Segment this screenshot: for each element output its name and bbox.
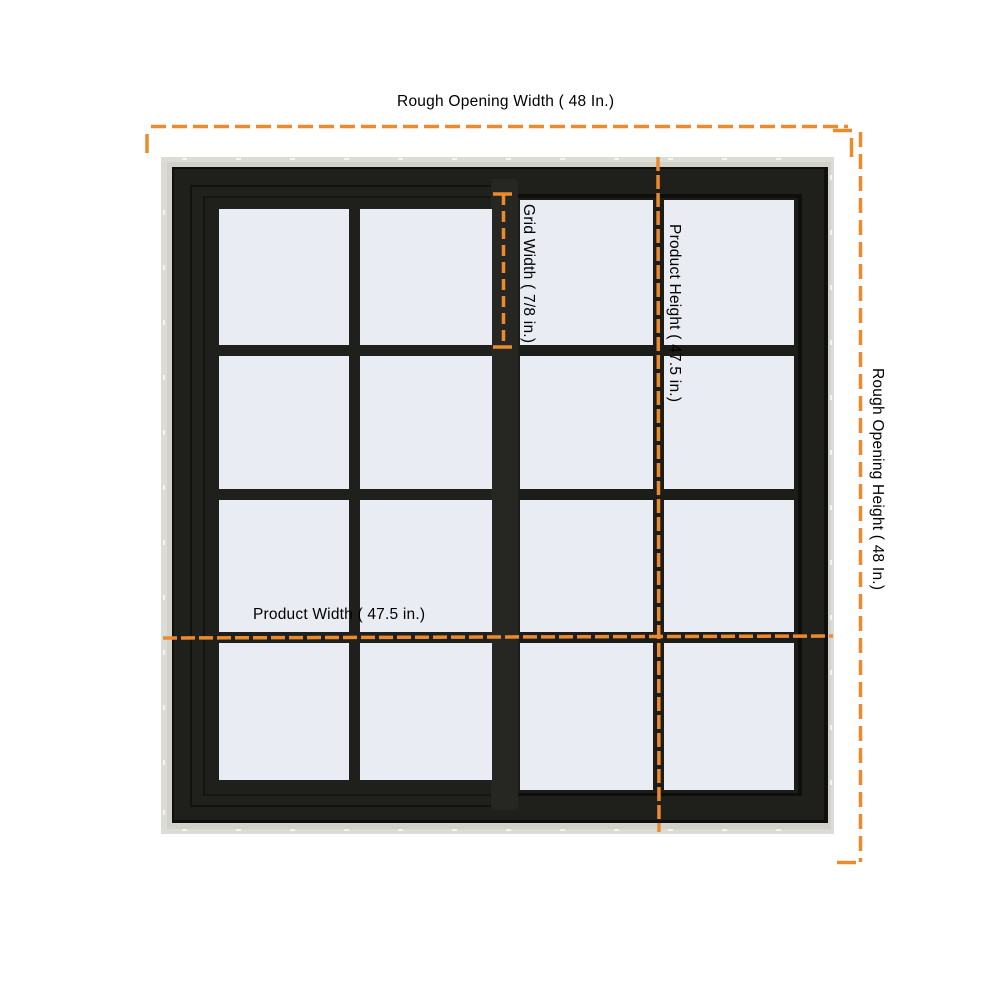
- window frame: [172, 167, 828, 823]
- glass panes: [219, 200, 794, 790]
- label: grid width: Grid Width ( 7/8 in.): [520, 204, 537, 343]
- meeting rail: [491, 179, 518, 810]
- product width line: [163, 636, 833, 638]
- label: rough opening width: Rough Opening Width ( 48 In.): [397, 93, 614, 110]
- grid width bottom cap: [493, 345, 512, 349]
- grid width top cap: [493, 192, 512, 196]
- rough opening height line: [859, 132, 862, 862]
- grid width line: [502, 194, 505, 347]
- left end tick: [145, 134, 149, 153]
- orange dimension lines: [147, 126, 860, 862]
- bottom end tick: [837, 861, 856, 864]
- label: product width: Product Width ( 47.5 in.): [253, 606, 425, 623]
- rough opening width line: [151, 125, 848, 128]
- product height line: [658, 157, 659, 832]
- nailing flange: [161, 157, 834, 834]
- label: rough opening height: Rough Opening Height ( 48 In.): [869, 368, 886, 590]
- label: product height: Product Height ( 47.5 in.): [666, 224, 683, 402]
- right end tick: [833, 130, 852, 157]
